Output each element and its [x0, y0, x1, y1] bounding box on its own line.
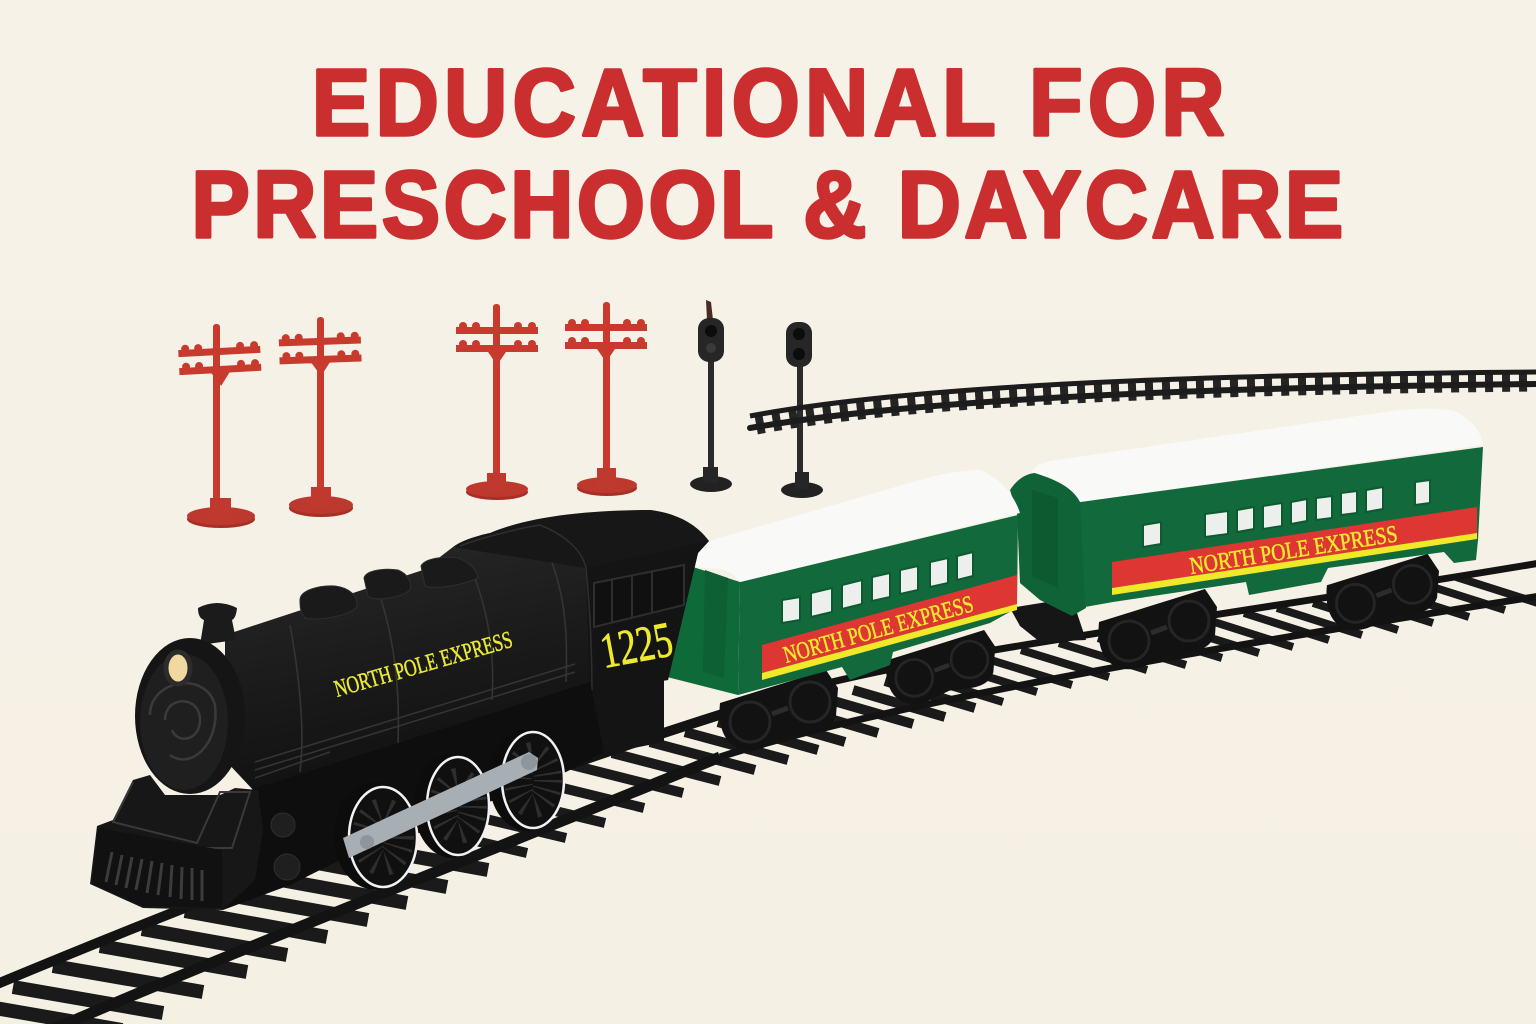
rear car end — [1010, 473, 1086, 616]
sleepers near — [0, 846, 488, 1024]
chassis — [200, 682, 604, 910]
front car stripe — [762, 575, 1017, 680]
sleepers far — [915, 577, 1536, 702]
pole 2 — [279, 317, 362, 517]
boiler domes — [300, 557, 478, 619]
headlamp — [166, 652, 190, 684]
drive wheels — [334, 729, 565, 890]
coupling — [1010, 598, 1086, 642]
rear car side — [1080, 447, 1483, 607]
front car lettering: NORTH POLE EXPRESS — [781, 591, 976, 669]
boiler — [225, 547, 592, 792]
cab panels — [594, 565, 684, 627]
pole 1 — [178, 324, 262, 528]
rear car lettering: NORTH POLE EXPRESS — [1188, 521, 1399, 580]
rear car stripe — [1112, 507, 1477, 595]
signal 2 — [781, 322, 823, 498]
front car end — [667, 567, 740, 695]
title — [191, 50, 1343, 258]
front car roof — [693, 470, 1020, 582]
smokebox — [135, 638, 245, 794]
rear car windows — [1143, 480, 1430, 547]
pole 3 — [456, 304, 538, 500]
title: PRESCHOOL & DAYCARE — [191, 152, 1343, 258]
telegraph poles — [178, 302, 647, 528]
signal lights — [690, 300, 823, 498]
pole 4 — [565, 302, 647, 496]
title: EDUCATIONAL FOR — [312, 50, 1225, 156]
near rail near section — [40, 757, 720, 1024]
cylinder knobs — [271, 813, 300, 880]
signal 1 — [690, 300, 732, 492]
front car windows — [782, 552, 973, 623]
far rail near section — [0, 690, 800, 987]
front passenger car — [667, 470, 1020, 750]
smokestack — [198, 603, 237, 645]
front car side — [738, 515, 1018, 695]
cab — [453, 510, 709, 692]
rear passenger car — [1010, 409, 1483, 669]
rear car roof — [1031, 409, 1483, 502]
rear undercarriage — [590, 680, 664, 754]
far curved track — [750, 372, 1536, 428]
far rail far section — [800, 563, 1536, 690]
boiler bands and louvres — [255, 545, 575, 778]
cowcatcher — [90, 775, 263, 910]
rear car trucks — [1099, 554, 1439, 669]
connecting rod — [343, 752, 538, 858]
sleepers middle — [407, 681, 975, 853]
near rail far section — [720, 596, 1536, 757]
boiler lettering: NORTH POLE EXPRESS — [331, 627, 516, 703]
cab number: 1225 — [596, 611, 677, 679]
locomotive — [90, 510, 709, 910]
front car trucks — [720, 630, 995, 750]
main curved track — [0, 563, 1536, 1024]
